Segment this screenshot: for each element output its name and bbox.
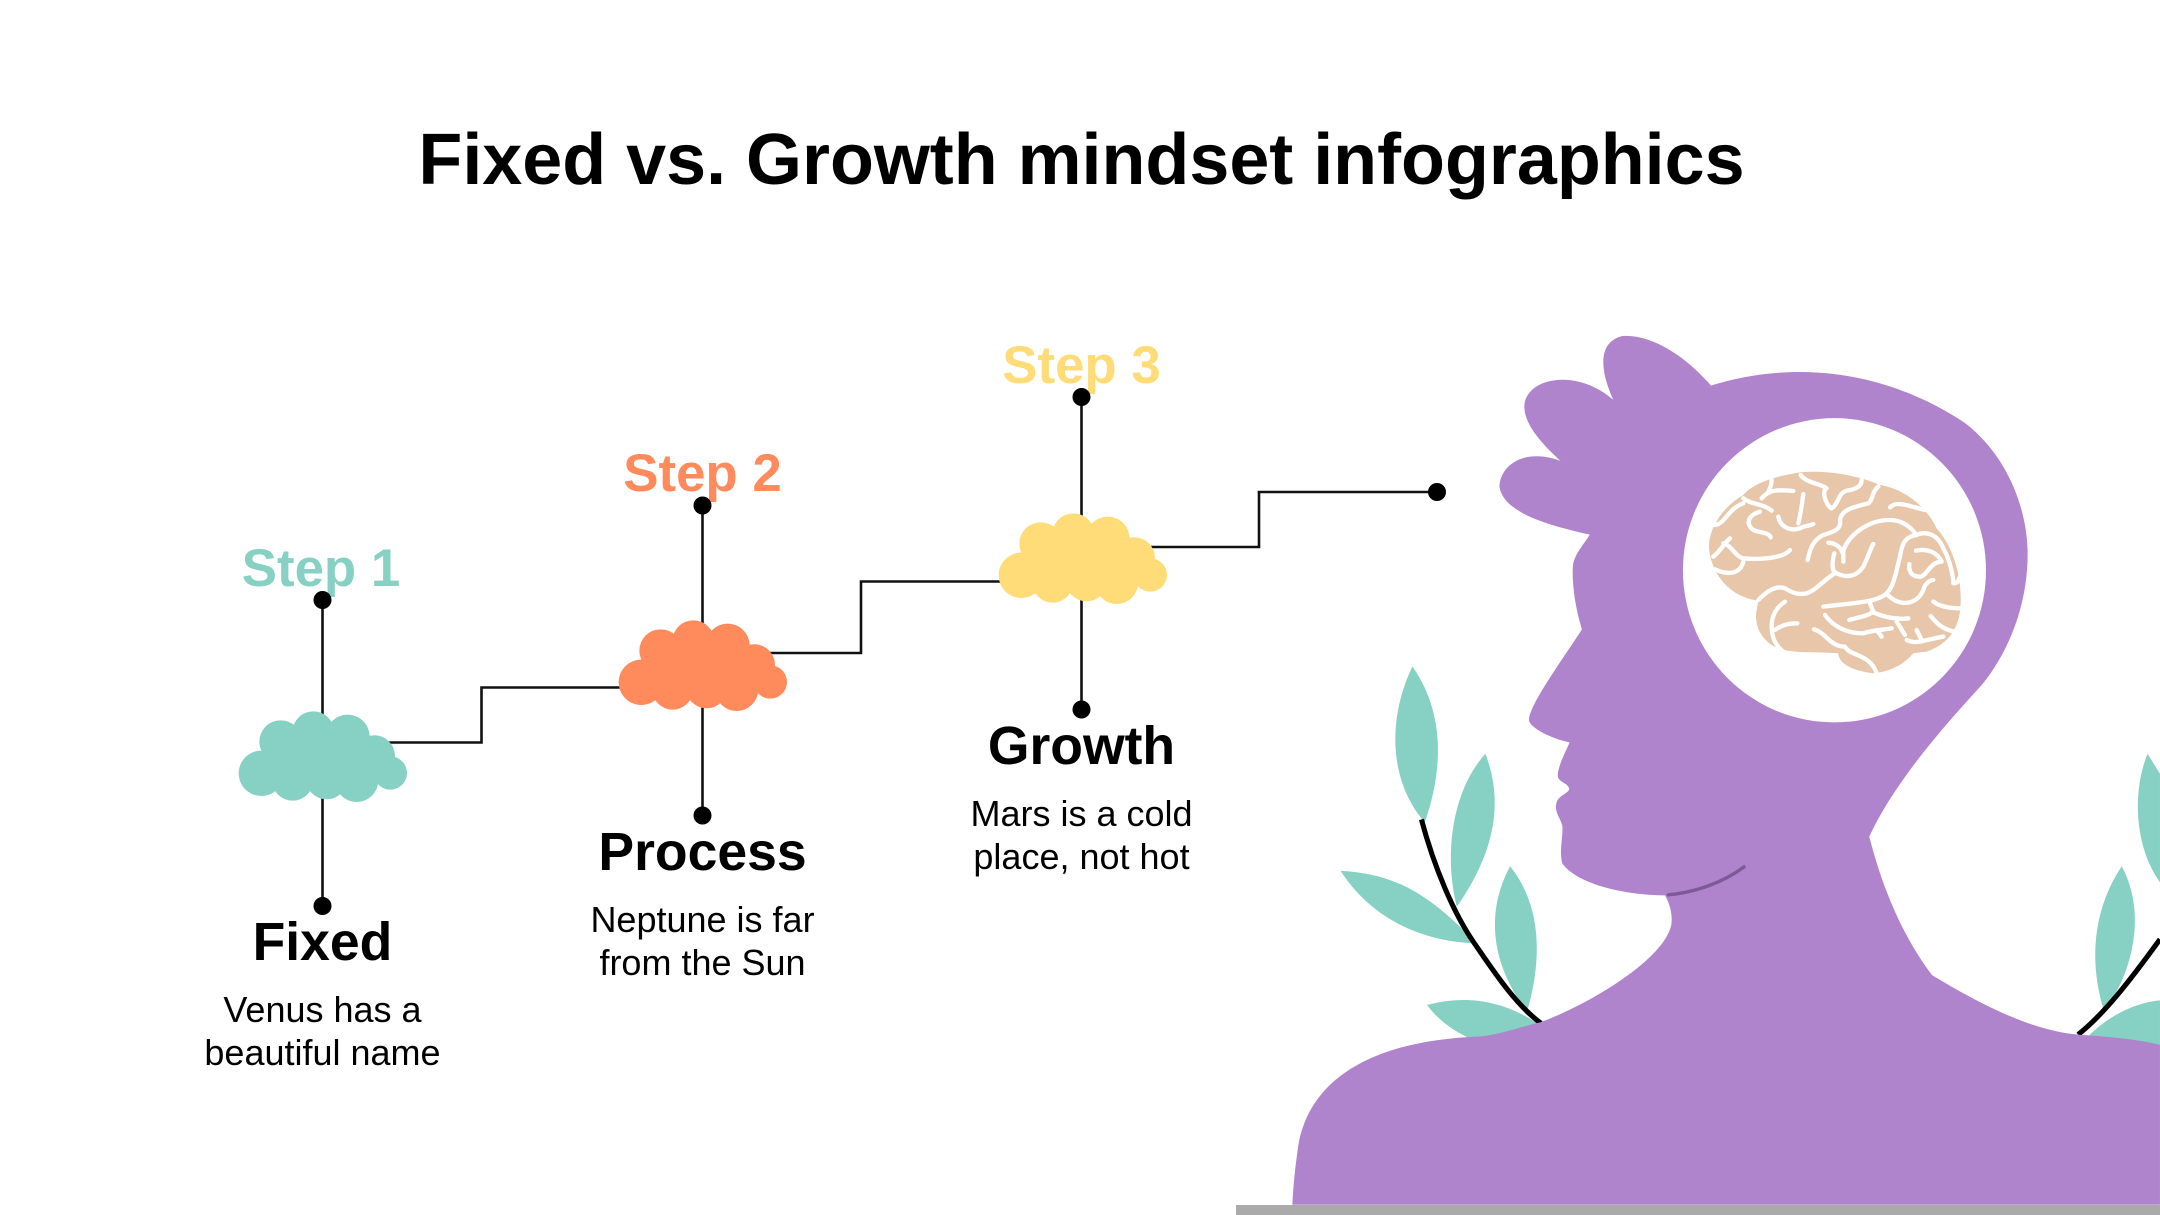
step 2 cloud [619, 620, 787, 711]
connector: step 1 to step 2 [385, 688, 625, 742]
step 2 top dot [694, 496, 712, 514]
step 1 label: Step 1 [242, 539, 400, 598]
connector: step 2 to step 3 [765, 582, 1005, 653]
brain folds [1713, 475, 1960, 673]
step 1 bottom dot [314, 897, 332, 915]
step 2 group [590, 444, 815, 983]
step 3 cloud [999, 513, 1167, 604]
step 2 bottom dot [694, 806, 712, 824]
step 2 description: Neptune is far [590, 899, 815, 940]
right leaves [2088, 754, 2160, 1048]
right branch [2078, 939, 2160, 1035]
step 2 vertical line [701, 506, 704, 816]
bottom grey bar [1236, 1205, 2160, 1215]
step 3 top dot [1072, 388, 1090, 406]
step 2 label: Step 2 [623, 444, 782, 503]
step 1 description: beautiful name [204, 1032, 441, 1073]
illustration: head with brain and leaves [1292, 336, 2160, 1205]
step 1 vertical line [321, 600, 324, 906]
step 1 group [204, 539, 441, 1073]
step 1 top dot [314, 591, 332, 609]
final connector dot [1428, 483, 1446, 501]
step 1 heading: Fixed [253, 913, 392, 972]
left leaves [1341, 666, 1544, 1039]
icon: brain [1709, 472, 1961, 673]
title: Fixed vs. Growth mindset infographics [418, 120, 1745, 200]
step 1 cloud [239, 711, 407, 802]
brain shape [1709, 472, 1961, 673]
step 3 description: place, not hot [973, 836, 1190, 877]
purple head and shoulders silhouette [1292, 336, 2160, 1205]
step 3 vertical line [1080, 397, 1083, 710]
step 2 description: from the Sun [599, 942, 806, 983]
step 3 label: Step 3 [1002, 336, 1161, 395]
step 3 description: Mars is a cold [970, 793, 1193, 834]
jaw line [1668, 867, 1744, 895]
connector: step 3 to head [1145, 492, 1437, 547]
step 2 heading: Process [598, 823, 807, 882]
left branch [1421, 819, 1541, 1023]
white head circle [1683, 418, 1986, 722]
step 3 bottom dot [1072, 700, 1090, 718]
step 3 heading: Growth [988, 717, 1175, 776]
step 1 description: Venus has a [223, 989, 423, 1030]
step 3 group [970, 336, 1193, 877]
